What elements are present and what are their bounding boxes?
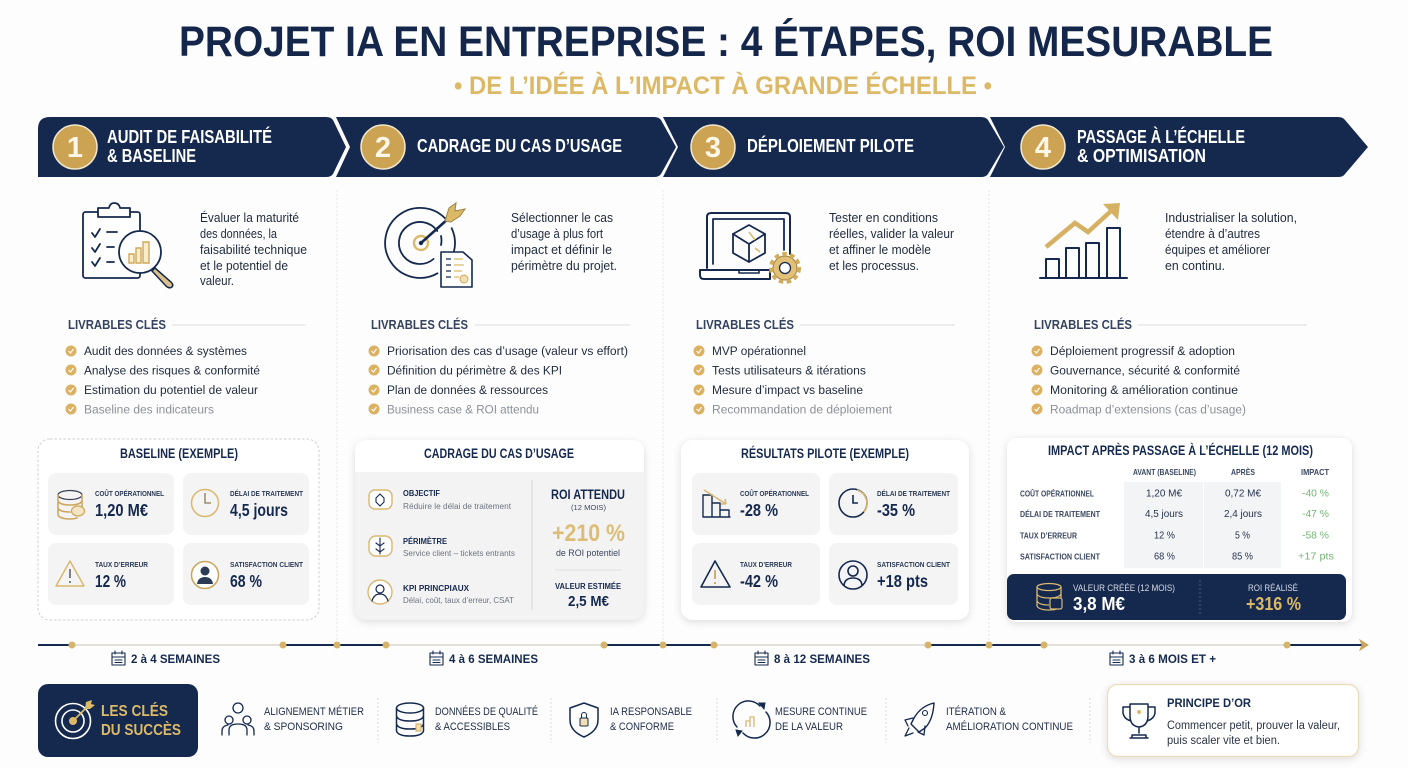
key: alignment bbox=[222, 703, 364, 735]
panel: pilot results bbox=[681, 440, 969, 620]
step 3 deliverables: Tests utilisateurs & itérations bbox=[712, 364, 866, 378]
impact table: 0,72 M€ bbox=[1225, 488, 1261, 500]
key: alignment: & SPONSORING bbox=[264, 721, 343, 733]
golden principle box bbox=[1108, 684, 1358, 756]
panel: baseline bbox=[38, 439, 319, 620]
icon: clipboard and magnifier bbox=[83, 203, 173, 288]
panel: pilot results: COÛT OPÉRATIONNEL bbox=[740, 489, 809, 498]
key: measure: MESURE CONTINUE bbox=[775, 706, 867, 718]
panel: cadrage: (12 MOIS) bbox=[571, 503, 607, 512]
step 3 header: DÉPLOIEMENT PILOTE bbox=[747, 135, 914, 156]
golden principle box: puis scaler vite et bien. bbox=[1167, 735, 1280, 747]
impact table: IMPACT bbox=[1301, 467, 1330, 477]
panel: pilot results: +18 pts bbox=[877, 571, 928, 591]
golden principle box: Commencer petit, prouver la valeur, bbox=[1167, 720, 1340, 732]
step 1 deliverables bbox=[66, 317, 306, 416]
impact table: 1,20 M€ bbox=[1146, 488, 1182, 500]
step 1 header: AUDIT DE FAISABILITÉ bbox=[107, 126, 272, 147]
step 1 deliverables: Analyse des risques & conformité bbox=[84, 364, 260, 378]
key: data: DONNÉES DE QUALITÉ bbox=[435, 705, 538, 718]
key: alignment: ALIGNEMENT MÉTIER bbox=[264, 705, 364, 718]
impact table: 85 % bbox=[1232, 550, 1253, 562]
value band: VALEUR CRÉÉE (12 MOIS) bbox=[1073, 583, 1175, 593]
step 2 header: 2 bbox=[375, 132, 391, 164]
key: responsible AI: & CONFORME bbox=[610, 721, 674, 733]
panel: pilot results: RÉSULTATS PILOTE (EXEMPLE) bbox=[741, 446, 909, 461]
success keys box bbox=[38, 684, 198, 757]
step 3 deliverables: Mesure d’impact vs baseline bbox=[712, 383, 863, 397]
icon: client bbox=[192, 562, 218, 588]
impact table: -47 % bbox=[1302, 508, 1329, 520]
step 1 deliverables: Audit des données & systèmes bbox=[84, 344, 247, 358]
panel: impact at scale: IMPACT APRÈS PASSAGE À L’ÉCHELLE (12 MOIS) bbox=[1048, 443, 1313, 458]
impact table bbox=[1020, 467, 1334, 562]
key: data bbox=[396, 703, 538, 736]
value band: 3,8 M€ bbox=[1073, 594, 1125, 614]
icon: coins bbox=[58, 490, 84, 519]
step 3 deliverables: LIVRABLES CLÉS bbox=[696, 317, 794, 332]
impact table: SATISFACTION CLIENT bbox=[1020, 552, 1101, 562]
panel: cadrage: de ROI potentiel bbox=[556, 548, 620, 558]
panel: pilot results: -28 % bbox=[740, 500, 778, 520]
impact table: 5 % bbox=[1235, 530, 1250, 542]
step 1 description: et le potentiel de bbox=[200, 259, 288, 273]
success keys box: DU SUCCÈS bbox=[101, 722, 181, 739]
key: responsible AI bbox=[570, 703, 692, 737]
panel: cadrage: Réduire le délai de traitement bbox=[403, 501, 512, 511]
panel: cadrage: ROI ATTENDU bbox=[551, 487, 625, 502]
icon: scope bbox=[369, 536, 392, 556]
panel: baseline: 12 % bbox=[95, 571, 126, 591]
step 1 deliverables: Baseline des indicateurs bbox=[84, 402, 214, 416]
step 4 deliverables: Gouvernance, sécurité & conformité bbox=[1050, 364, 1240, 378]
impact table: 12 % bbox=[1154, 530, 1175, 542]
panel: cadrage: Service client – tickets entrants bbox=[403, 548, 515, 558]
step 4 header: PASSAGE À L’ÉCHELLE bbox=[1077, 126, 1245, 147]
step 3 header bbox=[663, 117, 1004, 177]
step 1 deliverables: LIVRABLES CLÉS bbox=[68, 317, 166, 332]
step 3 description: Tester en conditions bbox=[829, 211, 938, 225]
step 4 description: étendre à d’autres bbox=[1165, 227, 1260, 241]
panel: baseline: BASELINE (EXEMPLE) bbox=[120, 446, 238, 461]
value band bbox=[1007, 574, 1346, 620]
duration: step 4: 3 à 6 MOIS ET + bbox=[1129, 652, 1216, 666]
subtitle: • DE L’IDÉE À L’IMPACT À GRANDE ÉCHELLE • bbox=[454, 71, 992, 100]
panel: pilot results: -42 % bbox=[740, 571, 778, 591]
step 2 deliverables: Plan de données & ressources bbox=[387, 383, 548, 397]
panel: cadrage: CADRAGE DU CAS D’USAGE bbox=[424, 446, 574, 461]
key: measure bbox=[733, 701, 867, 738]
panel: pilot results: -35 % bbox=[877, 500, 915, 520]
step 2 deliverables: Définition du périmètre & des KPI bbox=[387, 364, 562, 378]
step 3 header: 3 bbox=[705, 132, 721, 164]
icon: pilot warning bbox=[701, 561, 730, 587]
step 1 header bbox=[38, 117, 346, 177]
panel: cadrage: KPI PRINCPIAUX bbox=[403, 584, 470, 593]
icon: warning bbox=[56, 561, 84, 586]
key: data: & ACCESSIBLES bbox=[435, 721, 510, 733]
step 2 deliverables: LIVRABLES CLÉS bbox=[371, 317, 468, 332]
impact table: 2,4 jours bbox=[1224, 508, 1262, 520]
icon: target with arrow bbox=[385, 203, 472, 287]
duration: step 2: 4 à 6 SEMAINES bbox=[449, 652, 538, 666]
panel: baseline: 1,20 M€ bbox=[95, 500, 148, 520]
impact table: APRÈS bbox=[1231, 467, 1255, 477]
panel: cadrage: PÉRIMÈTRE bbox=[403, 537, 448, 546]
step 3 description bbox=[829, 211, 954, 273]
step 4 description: Industrialiser la solution, bbox=[1165, 211, 1297, 225]
key: responsible AI: IA RESPONSABLE bbox=[610, 706, 692, 718]
icon: falling cost bbox=[703, 490, 730, 517]
impact table: -58 % bbox=[1302, 530, 1329, 542]
timeline arrow bbox=[38, 640, 1368, 650]
golden principle box: PRINCIPE D’OR bbox=[1167, 696, 1251, 710]
step 4 deliverables: Roadmap d’extensions (cas d’usage) bbox=[1050, 402, 1246, 416]
step 2 description: Sélectionner le cas bbox=[511, 211, 613, 225]
step 4 description: équipes et améliorer bbox=[1165, 243, 1270, 257]
key: iteration: AMÉLIORATION CONTINUE bbox=[946, 720, 1073, 733]
panel: cadrage: 2,5 M€ bbox=[568, 593, 610, 610]
step 2 deliverables bbox=[368, 317, 630, 416]
impact table: AVANT (BASELINE) bbox=[1133, 467, 1196, 477]
impact table: 4,5 jours bbox=[1145, 508, 1183, 520]
step 2 header: CADRAGE DU CAS D’USAGE bbox=[417, 136, 622, 156]
panel: cadrage bbox=[355, 440, 644, 620]
impact table: DÉLAI DE TRAITEMENT bbox=[1020, 509, 1101, 519]
step 3 description: et affiner le modèle bbox=[829, 243, 931, 257]
impact table: TAUX D’ERREUR bbox=[1020, 530, 1077, 540]
impact table: +17 pts bbox=[1298, 550, 1334, 562]
title: PROJET IA EN ENTREPRISE : 4 ÉTAPES, ROI MESURABLE bbox=[179, 18, 1273, 66]
icon: pilot clock bbox=[839, 489, 867, 517]
impact table: COÛT OPÉRATIONNEL bbox=[1020, 488, 1094, 498]
icon: clock bbox=[192, 490, 218, 516]
step 4 header: & OPTIMISATION bbox=[1077, 146, 1206, 166]
value band: +316 % bbox=[1246, 594, 1301, 614]
impact table: -40 % bbox=[1302, 488, 1329, 500]
step 2 description: périmètre du projet. bbox=[511, 259, 617, 273]
duration: step 1: 2 à 4 SEMAINES bbox=[131, 652, 220, 666]
duration: step 3: 8 à 12 SEMAINES bbox=[774, 652, 870, 666]
step 2 description bbox=[511, 211, 617, 273]
step 1 description: Évaluer la maturité bbox=[200, 210, 299, 225]
key: iteration bbox=[905, 703, 1073, 736]
step 2 description: d’usage à plus fort bbox=[511, 227, 603, 241]
icon: KPI person bbox=[368, 580, 392, 604]
icon: objective bbox=[369, 490, 392, 509]
panel: pilot results: TAUX D’ERREUR bbox=[740, 560, 792, 569]
key: measure: DE LA VALEUR bbox=[775, 721, 843, 733]
panel: baseline: 4,5 jours bbox=[230, 500, 288, 520]
step 2 deliverables: Priorisation des cas d’usage (valeur vs effort) bbox=[387, 344, 628, 358]
panel: cadrage: VALEUR ESTIMÉE bbox=[555, 582, 622, 591]
panel: cadrage: OBJECTIF bbox=[403, 489, 440, 498]
step 1 description: valeur. bbox=[200, 274, 234, 288]
panel: cadrage: Délai, coût, taux d’erreur, CSAT bbox=[403, 595, 514, 605]
panel: baseline: 68 % bbox=[230, 571, 262, 591]
panel: baseline: DÉLAI DE TRAITEMENT bbox=[230, 489, 303, 498]
step 4 header: 4 bbox=[1035, 132, 1051, 164]
success keys box: LES CLÉS bbox=[101, 703, 168, 720]
step 1 description: des données, la bbox=[200, 227, 277, 241]
step 3 deliverables: MVP opérationnel bbox=[712, 344, 806, 358]
icon: laptop with cube and gear bbox=[700, 213, 799, 282]
step 1 header: & BASELINE bbox=[107, 146, 196, 166]
step 3 description: et les processus. bbox=[829, 259, 919, 273]
panel: pilot results: DÉLAI DE TRAITEMENT bbox=[877, 489, 950, 498]
panel: baseline: TAUX D’ERREUR bbox=[95, 560, 148, 569]
step 3 deliverables bbox=[694, 317, 955, 416]
step 1 deliverables: Estimation du potentiel de valeur bbox=[84, 383, 258, 397]
step 2 deliverables: Business case & ROI attendu bbox=[387, 402, 539, 416]
panel: pilot results: SATISFACTION CLIENT bbox=[877, 560, 950, 569]
step 4 header bbox=[990, 117, 1368, 177]
step 1 description bbox=[200, 210, 307, 288]
step 2 description: impact et définir le bbox=[511, 243, 612, 257]
panel: cadrage: +210 % bbox=[552, 520, 625, 547]
icon: growth chart bbox=[1040, 203, 1127, 278]
step 4 deliverables: Déploiement progressif & adoption bbox=[1050, 344, 1235, 358]
step 3 deliverables: Recommandation de déploiement bbox=[712, 402, 893, 416]
step 1 description: faisabilité technique bbox=[200, 243, 307, 257]
step 4 description: en continu. bbox=[1165, 259, 1225, 273]
step 3 description: réelles, valider la valeur bbox=[829, 227, 954, 241]
panel: baseline: SATISFACTION CLIENT bbox=[230, 560, 303, 569]
icon: pilot user bbox=[839, 561, 867, 589]
step 4 description bbox=[1165, 211, 1297, 273]
key: iteration: ITÉRATION & bbox=[946, 705, 1007, 718]
step 2 header bbox=[336, 117, 676, 177]
impact table: 68 % bbox=[1154, 550, 1175, 562]
step 1 header: 1 bbox=[67, 132, 83, 164]
panel: impact at scale bbox=[1007, 438, 1352, 622]
step 4 deliverables: Monitoring & amélioration continue bbox=[1050, 383, 1238, 397]
value band: ROI RÉALISÉ bbox=[1248, 583, 1298, 593]
step 4 deliverables bbox=[1032, 317, 1307, 416]
step 4 deliverables: LIVRABLES CLÉS bbox=[1034, 317, 1132, 332]
panel: baseline: COÛT OPÉRATIONNEL bbox=[95, 489, 164, 498]
